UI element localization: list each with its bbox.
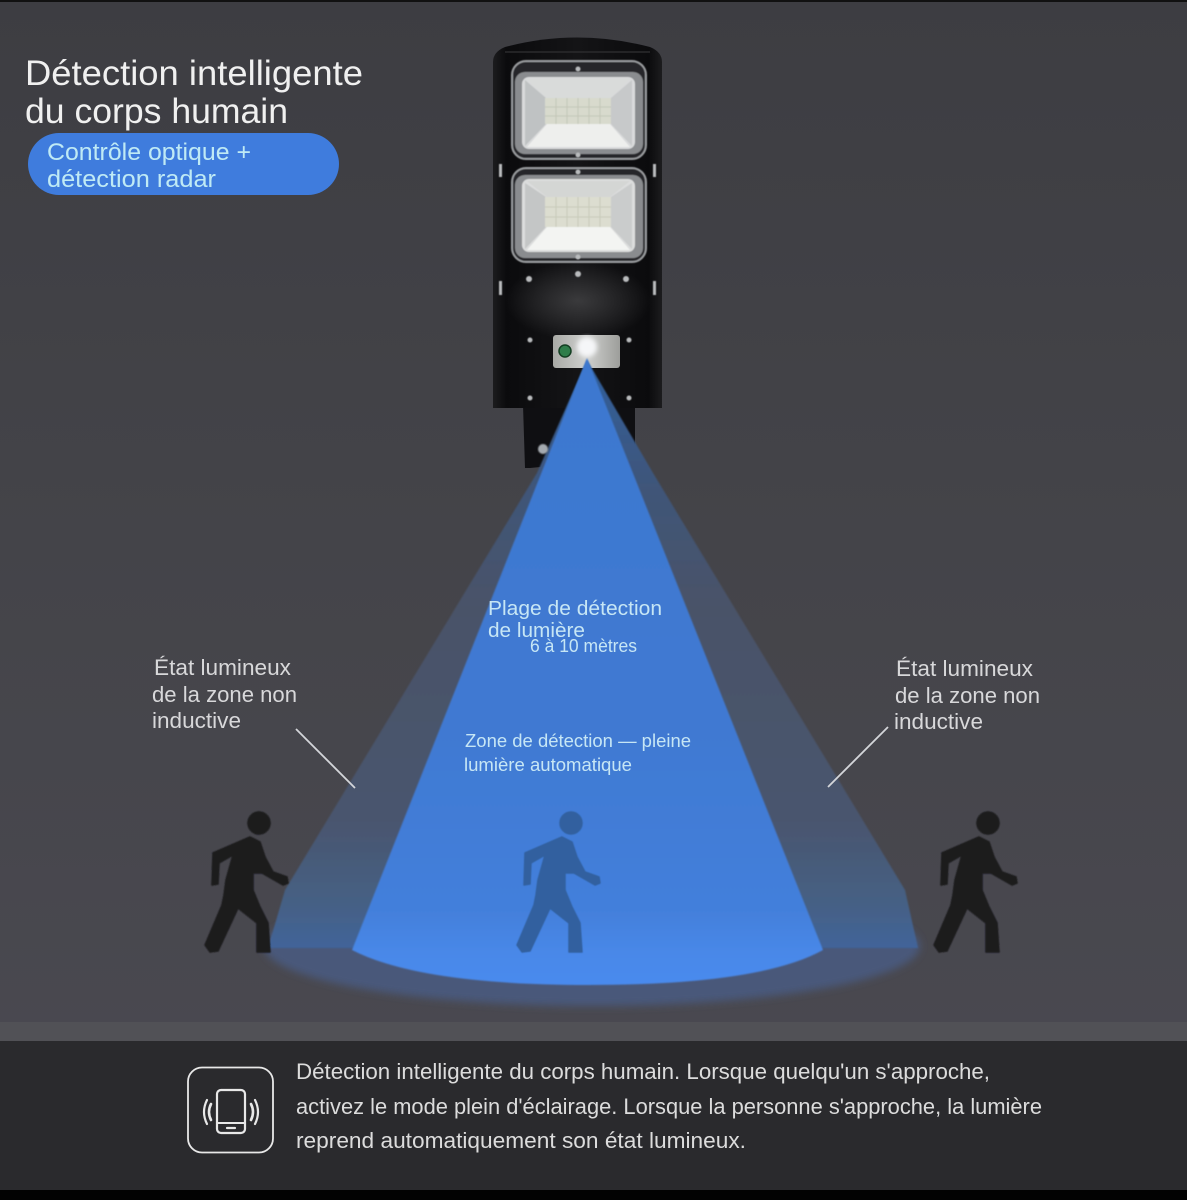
street lamp [493,38,662,468]
screws [499,66,656,400]
zone text [464,730,691,775]
outer light cone [264,360,920,1006]
walker center [517,812,600,952]
bracket bolt [538,444,548,454]
range text: Plage de détection [488,598,662,620]
black footer edge [0,1190,1187,1200]
left label: inductive [152,708,241,733]
title [25,54,363,131]
badge [28,133,339,195]
description text [296,1059,1042,1153]
lower LED panel [512,168,646,262]
right label: État lumineux [896,656,1033,681]
walker right [934,812,1017,952]
left label [152,655,297,733]
upper LED panel [512,61,646,159]
left label: État lumineux [154,655,291,680]
badge pill [28,133,339,195]
title: du corps humain [25,92,288,131]
walker left [205,812,288,952]
badge text: Contrôle optique + [47,139,251,166]
lamp bracket [523,405,635,468]
badge text [47,139,251,193]
right label: de la zone non [895,683,1040,708]
title: Détection intelligente [25,54,363,93]
right label [894,656,1040,734]
zone text: lumière automatique [464,754,632,775]
zone text: Zone de détection — pleine [465,730,691,751]
left label: de la zone non [152,682,297,707]
inner detection cone [352,358,823,985]
range text: 6 à 10 mètres [530,636,637,656]
bottom band [0,1041,1187,1200]
floor strip [0,1022,1187,1042]
description text: Détection intelligente du corps humain. Lorsque quelqu'un s'approche, [296,1059,990,1084]
sensor module [553,335,620,368]
badge text: détection radar [47,166,216,193]
range text: de lumière [488,620,585,642]
lamp body [493,38,662,408]
lamp top rim [505,51,650,53]
left pointer line [296,729,355,788]
band background [0,1041,1187,1190]
icon: vibrating phone [188,1068,273,1152]
description text: activez le mode plein d'éclairage. Lorsque la personne s'approche, la lumière [296,1094,1042,1119]
detection cone [264,358,920,1006]
range text [488,598,662,656]
right label: inductive [894,709,983,734]
top edge [0,0,1187,2]
lamp rounded shoulder [505,262,651,340]
description text: reprend automatiquement son état lumineux. [296,1128,746,1153]
right pointer line [828,727,888,787]
